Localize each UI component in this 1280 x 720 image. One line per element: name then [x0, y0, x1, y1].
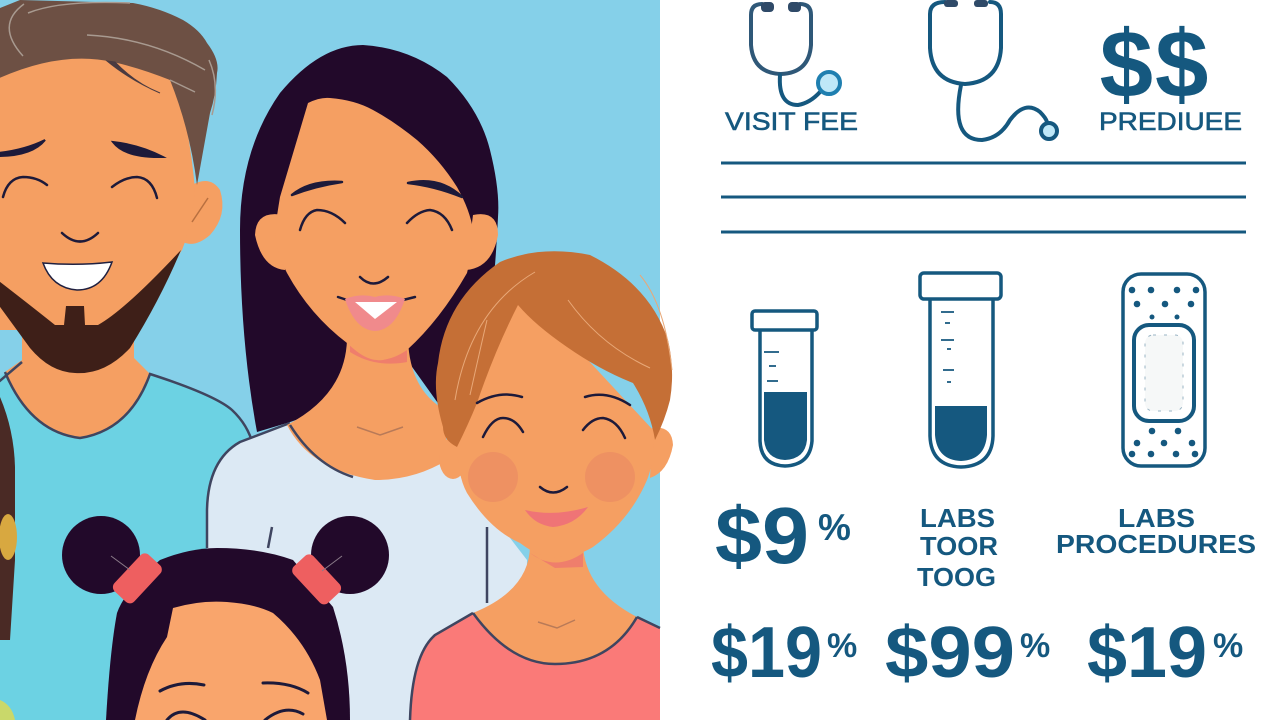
icon: dollar signs: $$ [1100, 11, 1210, 118]
price row: $99 [885, 613, 1015, 693]
icon: bandage [1123, 274, 1205, 466]
figure: mother [207, 45, 527, 720]
label: procedure: PREDIUEE [1099, 108, 1242, 136]
divider lines [721, 163, 1246, 232]
icon: stethoscope center [930, 0, 1057, 140]
label: visit fee: VISIT FEE [725, 108, 858, 136]
panel: family background [0, 0, 660, 720]
label: labs toor toog: TOOG [917, 562, 996, 592]
price: nine percent: $9 [715, 491, 809, 580]
label: labs procedures: LABS [1118, 503, 1195, 533]
icon: stethoscope left [751, 2, 840, 105]
icon: small test tube [752, 311, 817, 466]
figure: braid of person at left edge [0, 397, 17, 720]
label: labs toor toog: TOOR [920, 531, 998, 561]
price: nine percent: % [818, 507, 851, 548]
price row: $19 [1087, 613, 1207, 693]
figure: girl with buns [62, 516, 389, 720]
label: labs toor toog: LABS [920, 503, 995, 533]
price row: % [827, 627, 857, 665]
price row: % [1213, 627, 1243, 665]
panel: cost sheet background [660, 0, 1280, 720]
price row: $19 [711, 613, 822, 693]
figure: child in pink [410, 251, 673, 720]
figure: father [0, 0, 255, 720]
price row: % [1020, 627, 1050, 665]
label: labs toor toog [917, 503, 998, 592]
price: nine percent [715, 491, 851, 580]
price row [711, 613, 1243, 693]
icon: tall test tube [920, 273, 1001, 467]
label: labs procedures: PROCEDURES [1056, 529, 1256, 559]
label: labs procedures [1056, 503, 1256, 559]
